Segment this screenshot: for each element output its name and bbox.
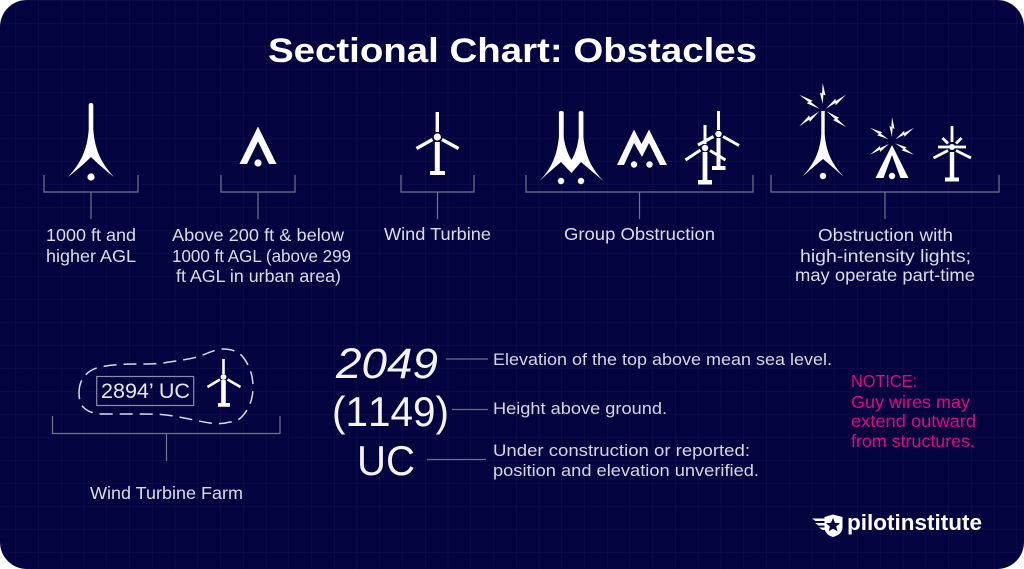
value: UC: UC	[357, 437, 415, 484]
label: Above 200 ft & below	[172, 225, 344, 245]
bracket	[526, 175, 753, 219]
description: height: Height above ground.	[493, 399, 667, 418]
label	[795, 225, 975, 285]
icon: lit wind turbine	[934, 126, 971, 182]
notice	[851, 371, 976, 451]
label: Wind Turbine	[384, 224, 491, 244]
notice: extend outward	[851, 411, 976, 431]
elevation key	[332, 340, 832, 484]
icon: lit tall obstacle	[798, 83, 848, 179]
bracket	[221, 175, 295, 219]
label: Obstruction with	[818, 225, 953, 245]
label: 1000 ft and	[46, 225, 136, 245]
value: 2049: 2049	[335, 340, 438, 388]
icon: short obstacle	[240, 126, 276, 167]
panel: wind turbine farm	[52, 349, 280, 503]
panel: 1000 ft and higher AGL	[44, 103, 138, 266]
icon: farm wind turbine	[208, 359, 240, 407]
bracket	[52, 416, 280, 461]
icon: wind turbine	[416, 112, 458, 175]
icon: tall obstacle	[68, 103, 114, 181]
notice: from structures.	[851, 431, 975, 451]
panel: high-intensity lights	[771, 83, 999, 285]
icon: lit short obstacle	[869, 117, 915, 179]
description: elevation: Elevation of the top above mean sea level.	[493, 350, 832, 369]
label: high-intensity lights;	[800, 246, 971, 266]
label: may operate part-time	[795, 265, 975, 285]
icon: double short obstacle	[617, 130, 667, 168]
panel: 200 to 1000 ft AGL	[172, 126, 351, 286]
description: under construction: position and elevation unverified.	[493, 461, 759, 480]
logo	[812, 510, 982, 537]
icon: winged shield	[812, 514, 842, 537]
title: Sectional Chart: Obstacles	[268, 32, 757, 70]
notice: Guy wires may	[851, 392, 970, 412]
bracket	[401, 175, 474, 219]
bracket	[44, 175, 138, 219]
elevation box	[97, 376, 194, 406]
icon: double tall obstacle	[540, 111, 604, 184]
label: 1000 ft AGL (above 299	[172, 246, 351, 266]
notice: NOTICE:	[851, 371, 917, 391]
label	[46, 225, 136, 266]
elevation text: 2894’ UC	[101, 380, 190, 403]
label: Wind Turbine Farm	[90, 483, 243, 503]
label: ft AGL in urban area)	[176, 266, 341, 286]
panel: group obstruction	[526, 111, 753, 244]
description: under construction	[493, 441, 759, 480]
label: higher AGL	[46, 246, 136, 266]
dashed farm boundary	[79, 349, 253, 424]
logo wordmark: pilotinstitute	[847, 510, 982, 535]
panel: wind turbine	[384, 112, 491, 244]
description: under construction: Under construction or reported:	[493, 441, 750, 460]
label: Group Obstruction	[564, 224, 715, 244]
icon: double wind turbine	[686, 111, 739, 184]
value: 1149: (1149)	[332, 388, 449, 435]
leader lines	[427, 359, 488, 460]
bracket	[771, 175, 999, 219]
label	[172, 225, 351, 286]
